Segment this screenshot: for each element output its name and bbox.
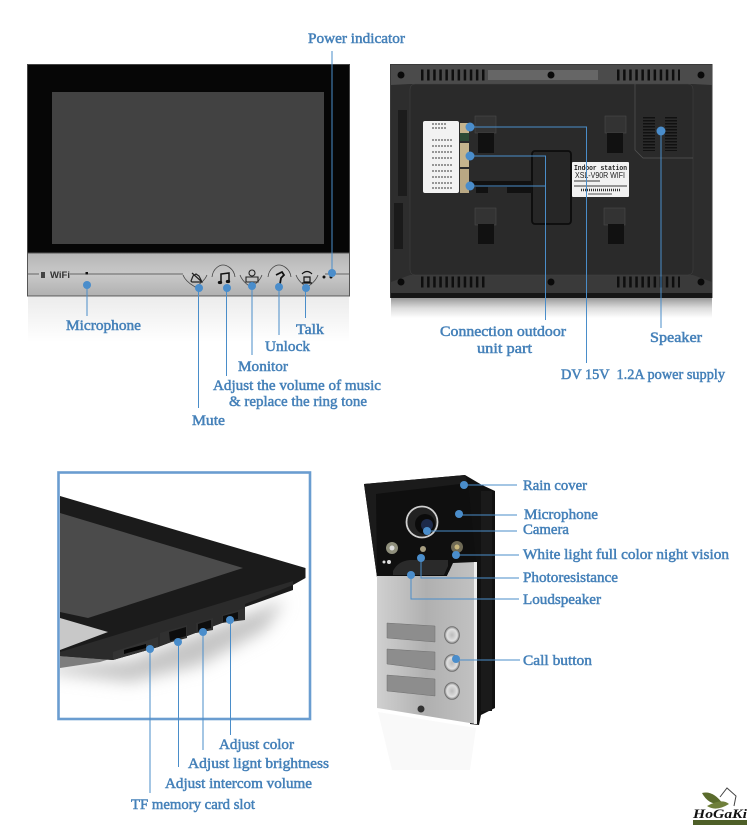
labels: door unit: Camera: [523, 522, 570, 538]
power indicator lights: [322, 276, 332, 278]
labels: door unit: Microphone: [524, 507, 598, 523]
panel: outdoor door unit: [364, 475, 495, 770]
labels: monitor front: & replace the ring tone: [229, 394, 367, 410]
camera: [406, 506, 438, 538]
labels: door unit: Photoresistance: [523, 570, 618, 586]
floor shadow: [50, 600, 285, 682]
labels: monitor back: DV 15V 1.2A power supply: [561, 367, 726, 383]
silver plate: [377, 562, 476, 724]
labels: monitor front: Monitor: [238, 359, 288, 375]
screen: [60, 513, 243, 618]
panel: indoor monitor back: [390, 64, 712, 318]
side slots: [398, 110, 407, 196]
back reflection: [391, 298, 712, 318]
lower lip: [391, 275, 712, 298]
inner panel: [410, 84, 693, 275]
labels: side buttons: [131, 737, 329, 813]
panel: indoor monitor front: [28, 64, 350, 342]
WiFi mark: [28, 265, 349, 287]
rain hood side: [364, 475, 468, 577]
lower edge: [60, 581, 293, 660]
monitor body: [60, 496, 306, 660]
labels: monitor front: Mute: [192, 413, 225, 429]
speaker grille: [393, 560, 448, 575]
dark face: [376, 483, 476, 577]
wiring label: [423, 121, 459, 193]
labels: monitor back: Connection outdoor: [440, 324, 566, 340]
labels: side buttons: Adjust lignt brightness: [188, 756, 329, 772]
panel: monitor side detail: [50, 472, 310, 719]
mounting hooks: [475, 116, 626, 244]
labels: monitor back: Speaker: [650, 330, 702, 346]
logo: HoGaKi: [692, 788, 747, 825]
labels: monitor front: Unlock: [265, 339, 311, 355]
icon: unlock key: [276, 272, 284, 284]
callouts: connector lines: [87, 51, 661, 793]
station label: Indoor station: [574, 165, 627, 173]
back casing: [390, 64, 712, 298]
station label: XSL-V90R WIFI: [575, 171, 625, 180]
vents: [421, 75, 680, 282]
labels: monitor back: [440, 324, 726, 383]
labels: monitor front: Talk: [296, 322, 325, 338]
grey base edge: [60, 656, 108, 668]
labels: monitor front: Adjust the volume of music: [213, 378, 381, 394]
labels: door unit: [523, 478, 730, 669]
icon: mute: [191, 273, 202, 282]
labels: monitor front: Power indicator: [308, 31, 405, 47]
icon: music note: [218, 273, 230, 284]
callout dots: [83, 122, 666, 663]
labels: monitor front: [66, 31, 405, 429]
call buttons: [444, 626, 460, 700]
card slot: [114, 647, 158, 660]
central recess: [532, 151, 571, 224]
silver bar: [60, 618, 108, 650]
monitor silver button bar: [28, 253, 350, 296]
icon: monitor person: [246, 270, 258, 282]
speaker compartment: [635, 84, 693, 158]
slots: [472, 181, 532, 187]
labels: door unit: Rain cover: [523, 478, 587, 494]
LEDs: [382, 541, 463, 564]
labels: door unit: White light full color night vision: [523, 547, 730, 563]
speaker grille: [649, 117, 671, 151]
name plates: [387, 623, 435, 696]
connectors: [460, 123, 469, 193]
labels: monitor back: unit part: [477, 341, 532, 357]
blue frame: [58, 472, 310, 719]
screw holes: [398, 72, 704, 286]
unit reflection: [378, 712, 476, 770]
plate screw: [418, 706, 424, 712]
side buttons: [169, 612, 245, 642]
labels: door unit: Loudspeaker: [523, 592, 601, 608]
logo: HoGaKi: HoGaKi: [692, 806, 747, 821]
image clip area: [50, 496, 306, 682]
labels: monitor front: Microphone: [66, 318, 141, 334]
monitor reflection: [28, 297, 349, 342]
labels: side buttons: TF memory card slot: [131, 797, 255, 813]
monitor bezel: [28, 64, 350, 254]
icon: talk handset: [302, 272, 312, 283]
monitor screen: [52, 92, 324, 244]
labels: side buttons: Adjust color: [219, 737, 294, 753]
upper lip: [391, 65, 712, 85]
WiFi mark: WiFi: [50, 270, 70, 281]
unit side housing: [364, 475, 495, 725]
station label: [572, 162, 629, 197]
side highlight band: [481, 491, 492, 711]
labels: side buttons: Adjust intercom volume: [165, 776, 312, 792]
labels: door unit: Call button: [523, 653, 593, 669]
